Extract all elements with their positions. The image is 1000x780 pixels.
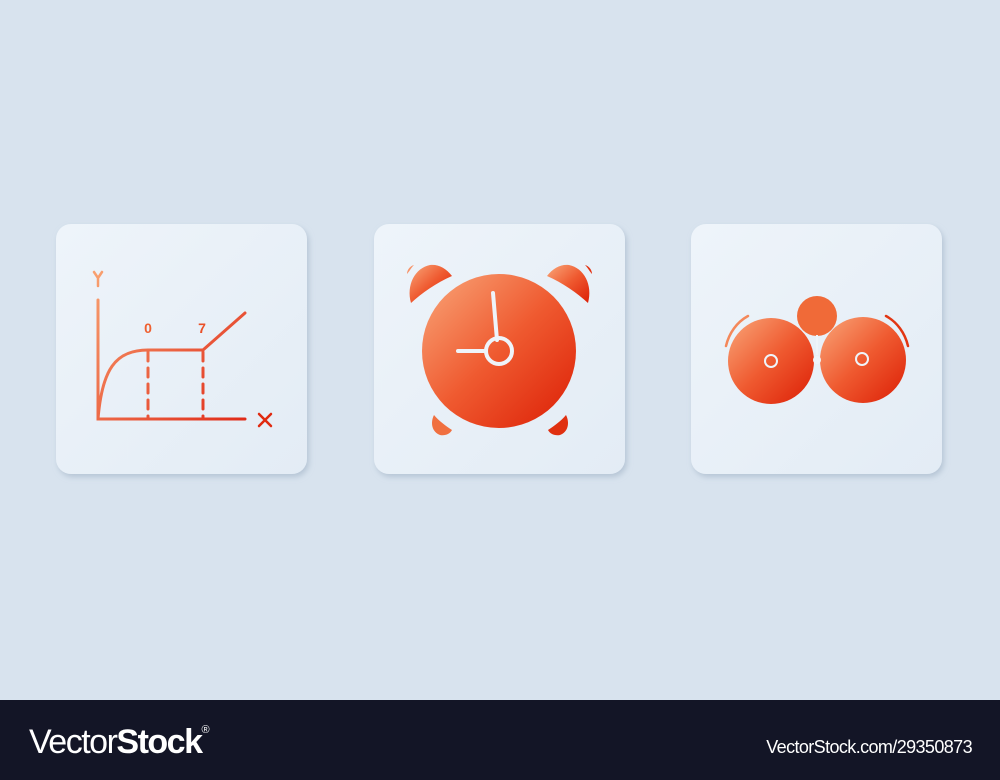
footer bar (0, 700, 1000, 780)
footer logo: VectorStock (29, 723, 201, 761)
footer id: VectorStock.com/29350873 (766, 737, 973, 757)
icon: graph: 7 (198, 320, 206, 336)
icon: graph: 0 (144, 320, 152, 336)
card: bells (691, 224, 942, 474)
card: chart (56, 224, 307, 474)
footer logo: ® (201, 724, 209, 736)
icon: alarm clock (407, 265, 592, 435)
card: alarm clock (374, 224, 625, 474)
icon: ringing bell (726, 296, 908, 404)
icon: graph (94, 272, 271, 426)
